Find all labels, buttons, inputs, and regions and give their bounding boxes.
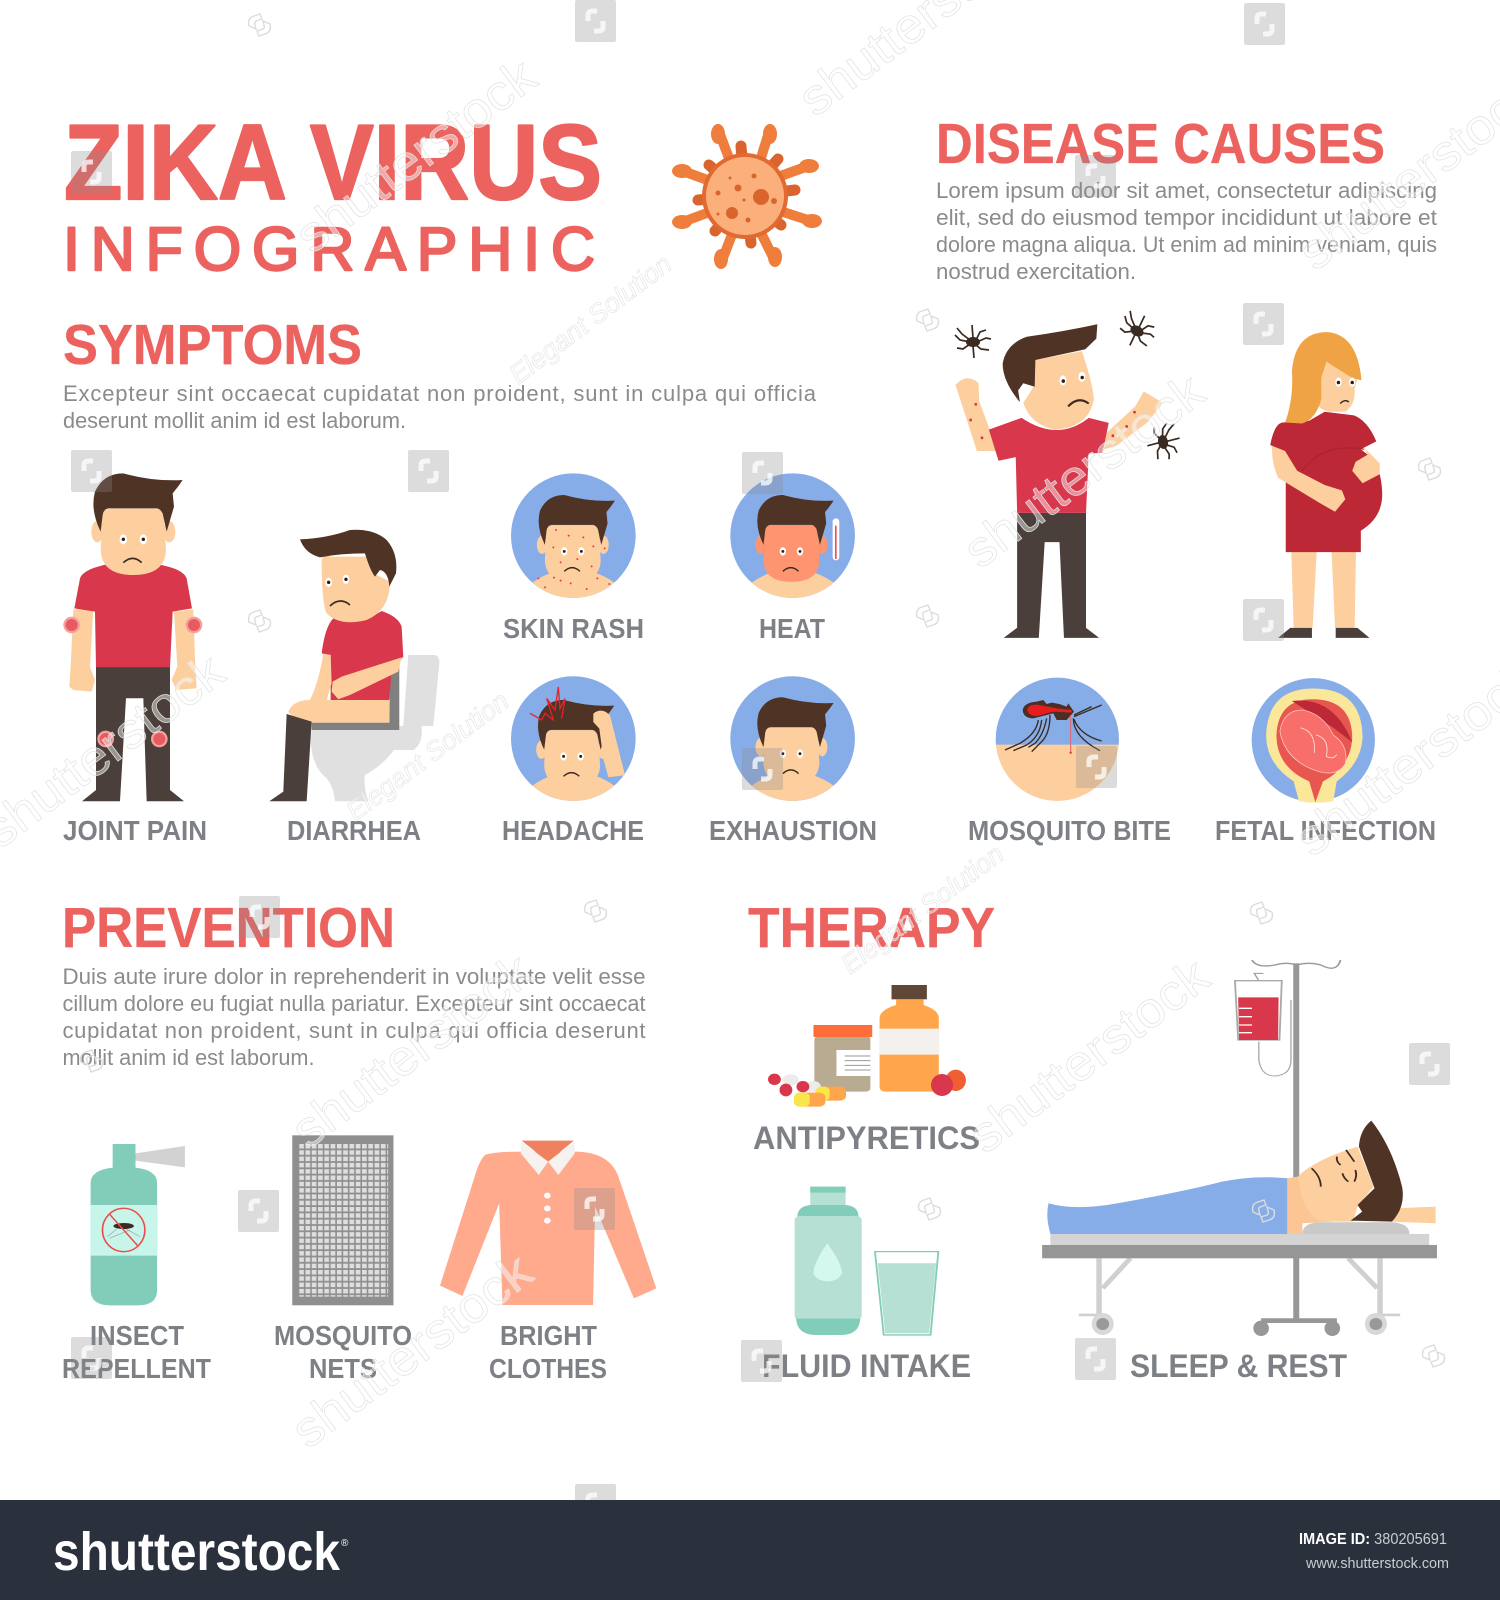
label: skin rash: SKIN RASH — [503, 613, 644, 644]
label: mosquito nets: NETS — [309, 1353, 377, 1384]
footer url: www.shutterstock.com — [1305, 1555, 1449, 1572]
watermark layer: shutterstock — [281, 1242, 543, 1459]
label: insect repellent: REPELLENT — [62, 1353, 211, 1384]
illustration: diarrhea man on toilet — [269, 530, 439, 801]
icon: insect repellent bottle — [91, 1144, 185, 1305]
icon: fetal infection badge — [1252, 678, 1375, 803]
watermark layer: shutterstock — [285, 47, 547, 264]
icon: mosquito top right — [1113, 307, 1161, 354]
label: joint pain: JOINT PAIN — [63, 815, 207, 846]
icon: virus — [672, 124, 822, 269]
label: insect repellent: INSECT — [90, 1320, 184, 1351]
watermark layer: shutterstock — [958, 947, 1220, 1164]
heading: symptoms: SYMPTOMS — [63, 313, 362, 377]
icon: headache badge — [511, 676, 636, 802]
footer image id: IMAGE ID: 380205691 — [1299, 1531, 1447, 1548]
watermark layer: shutterstock — [953, 362, 1215, 579]
text block: prevention — [62, 964, 646, 1070]
watermark layer: shutterstock — [281, 942, 543, 1159]
illustration: patient on bed with IV drip — [1042, 960, 1437, 1336]
label: exhaustion: EXHAUSTION — [709, 815, 877, 846]
text block: disease causes — [936, 178, 1437, 284]
title: Zika Virus: ZIKA VIRUS — [64, 102, 602, 222]
label: mosquito nets: MOSQUITO — [274, 1320, 412, 1351]
label: diarrhea: DIARRHEA — [287, 815, 421, 846]
text block: prevention: cupidatat non proident, sunt in culpa qui officia deserunt — [62, 1018, 646, 1043]
icon: heat badge — [730, 473, 855, 599]
illustration: pregnant woman — [1270, 332, 1382, 638]
icon: mosquito lower right — [1144, 421, 1183, 463]
text block: prevention: cillum dolore eu fugiat nulla pariatur. Excepteur sint occaecat — [62, 991, 646, 1016]
icon: mosquito net — [292, 1135, 393, 1305]
subtitle: Infographic: INFOGRAPHIC — [63, 215, 595, 283]
text block: prevention: Duis aute irure dolor in reprehenderit in voluptate velit esse — [62, 964, 646, 989]
label: fetal infection: FETAL INFECTION — [1215, 815, 1436, 846]
icon: bright shirt — [440, 1141, 656, 1305]
icon: medicine bottles and pills — [768, 985, 966, 1107]
text block: disease causes: Lorem ipsum dolor sit amet, consectetur adipiscing — [936, 178, 1437, 203]
text block: disease causes: elit, sed do eiusmod tempor incididunt ut labore et — [936, 205, 1437, 230]
illustration: joint pain man — [63, 473, 202, 801]
heading: therapy: THERAPY — [748, 896, 995, 960]
footer logo: shutterstock — [53, 1522, 341, 1582]
label: bright clothes: CLOTHES — [489, 1353, 607, 1384]
label: bright clothes: BRIGHT — [500, 1320, 597, 1351]
text block: disease causes: nostrud exercitation. — [936, 259, 1136, 284]
text block: symptoms: Excepteur sint occaecat cupidatat non proident, sunt in culpa qui officia — [63, 381, 817, 406]
illustration: man with mosquitoes — [955, 324, 1163, 638]
label: fluid intake: FLUID INTAKE — [762, 1348, 971, 1384]
footer registered mark: ® — [341, 1538, 349, 1549]
icon: mosquito top left — [955, 325, 991, 358]
label: mosquito bite: MOSQUITO BITE — [968, 815, 1171, 846]
heading: prevention: PREVENTION — [62, 896, 395, 960]
heading: disease causes: DISEASE CAUSES — [936, 112, 1385, 176]
label: mosquito nets — [274, 1320, 412, 1384]
icon: water bottle and glass — [795, 1187, 938, 1335]
label: bright clothes — [489, 1320, 607, 1384]
text block: symptoms — [63, 381, 817, 433]
icon: mosquito bite badge — [996, 678, 1119, 801]
label: headache: HEADACHE — [502, 815, 644, 846]
label: insect repellent — [62, 1320, 211, 1384]
label: antipyretics: ANTIPYRETICS — [753, 1120, 980, 1156]
icon: exhaustion badge — [730, 676, 855, 802]
watermark layer: Elegant Solution — [836, 838, 1009, 980]
text block: prevention: mollit anim id est laborum. — [62, 1045, 314, 1070]
label: heat: HEAT — [759, 613, 825, 644]
label: sleep and rest: SLEEP & REST — [1130, 1348, 1347, 1384]
text block: symptoms: deserunt mollit anim id est laborum. — [63, 408, 406, 433]
icon: skin rash badge — [511, 473, 636, 599]
watermark layer: Elegant Solution — [341, 685, 514, 827]
text block: disease causes: dolore magna aliqua. Ut enim ad minim veniam, quis — [936, 232, 1437, 257]
footer bar — [0, 1500, 1500, 1600]
watermark layer: Elegant Solution — [504, 248, 677, 390]
